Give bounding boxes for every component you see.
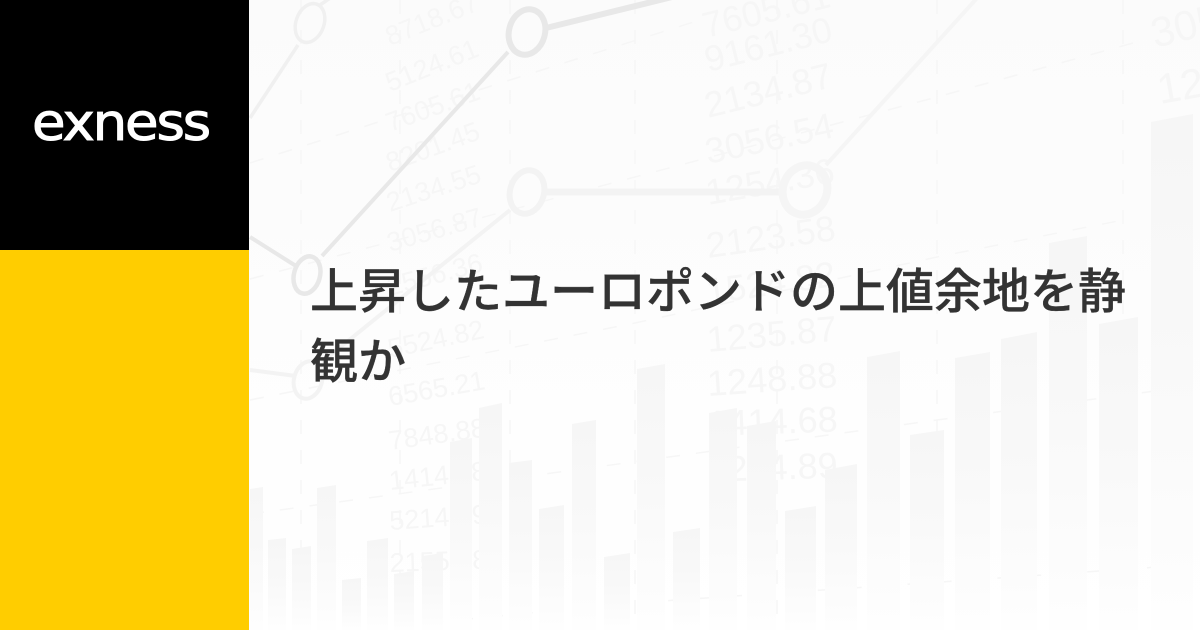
background price numbers: 5524.82 xyxy=(385,314,487,364)
background price numbers: 9161.30 xyxy=(700,8,836,80)
background price numbers: 1235.87 xyxy=(705,308,838,360)
background price numbers: 3056.87 xyxy=(383,202,485,258)
background price numbers: 1414.68 xyxy=(707,398,838,444)
background price numbers: 2155.48 xyxy=(389,545,488,578)
background price numbers: 5124.61 xyxy=(381,33,483,98)
background price numbers: 1414.68 xyxy=(387,456,488,496)
background price numbers: 7605.61 xyxy=(382,76,484,138)
line chart xyxy=(250,0,978,402)
background price numbers: 6565.21 xyxy=(386,365,487,412)
title: 上昇したユーロポンドの上値余地を静観か xyxy=(310,266,1126,389)
yellow panel xyxy=(0,250,249,630)
background price numbers: 7848.88 xyxy=(387,413,487,456)
background price numbers: 1524.82 xyxy=(703,253,838,312)
black logo panel xyxy=(0,0,249,250)
background price numbers: 2556.36 xyxy=(384,248,486,302)
bars xyxy=(250,114,1193,630)
background price numbers: 2134.87 xyxy=(700,54,836,126)
background price numbers: 2123.58 xyxy=(703,207,838,266)
background price numbers: 1254.36 xyxy=(702,150,838,213)
logo: exness: exness xyxy=(32,94,209,153)
background price numbers: 2134.55 xyxy=(383,159,485,218)
background price numbers: 1234.89 xyxy=(707,444,838,490)
background price numbers: 1248.88 xyxy=(706,354,838,404)
background price numbers xyxy=(381,0,1200,578)
background price numbers: 8201.45 xyxy=(382,116,484,178)
background price numbers: 5214.89 xyxy=(388,499,488,536)
background price numbers: 3056.54 xyxy=(701,105,837,172)
